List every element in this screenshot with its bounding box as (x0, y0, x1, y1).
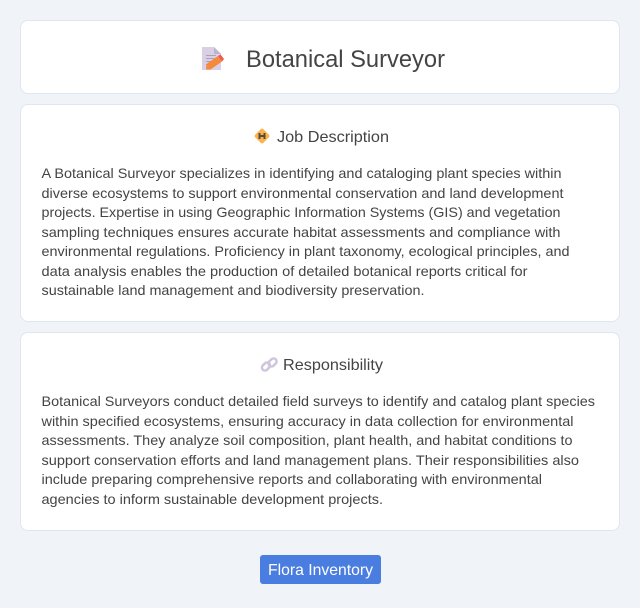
icon: diamond sign (254, 128, 270, 144)
job description text: diverse ecosystems to support environmental conservation and land development (42, 185, 564, 201)
job description text: data analysis enables the production of detailed botanical reports critical for (42, 263, 528, 279)
job description text: A Botanical Surveyor specializes in identifying and cataloging plant species within (42, 165, 562, 181)
panel: title card (20, 20, 620, 94)
responsibility text: within specified ecosystems, ensuring accuracy in data collection for environmental (40, 413, 573, 429)
job description text: projects. Expertise in using Geographic Information Systems (GIS) and vegetation (42, 204, 560, 220)
job description text: sustainable land management and biodiversity preservation. (42, 282, 424, 298)
responsibility text: assessments. They analyze soil composition, plant health, and habitat conditions to (42, 432, 573, 448)
button: Flora Inventory (260, 555, 381, 584)
job description text: environmental regulations. Proficiency in plant taxonomy, ecological principles, and (42, 243, 570, 259)
panel: responsibility (20, 332, 620, 531)
heading: job description: Job Description (277, 129, 389, 146)
button: Flora Inventory: Flora Inventory (268, 562, 373, 579)
responsibility text (40, 393, 595, 507)
title text: Botanical Surveyor (246, 46, 445, 73)
title row (202, 46, 445, 73)
responsibility text: agencies to inform sustainable development projects. (42, 491, 383, 507)
responsibility text: include preparing comprehensive reports and collaborating with environmental (42, 471, 542, 487)
icon: document with pencil (202, 47, 224, 70)
panel: job description (20, 104, 620, 322)
job description text: sampling techniques ensures accurate habitat assessments and compliance with (42, 224, 560, 240)
icon: chain link (261, 357, 278, 372)
job description text (42, 165, 570, 298)
responsibility text: support conservation efforts and land management plans. Their responsibilities also (42, 452, 579, 468)
heading: responsibility: Responsibility (283, 357, 383, 374)
responsibility text: Botanical Surveyors conduct detailed field surveys to identify and catalog plant species (42, 393, 595, 409)
